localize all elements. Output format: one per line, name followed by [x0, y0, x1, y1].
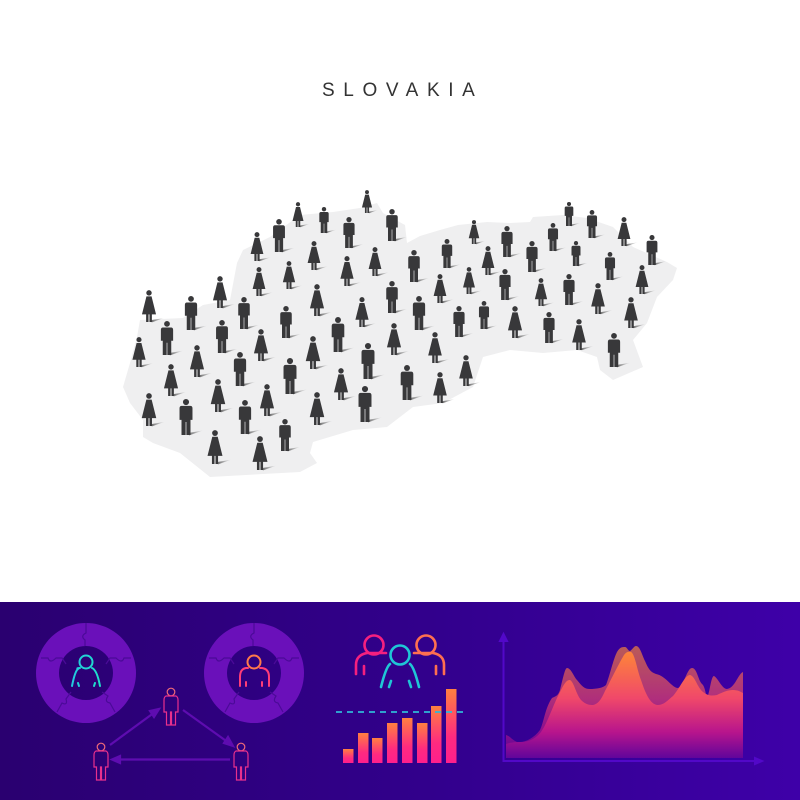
map: Slovakia silhouette	[123, 203, 677, 477]
title: SLOVAKIA	[322, 80, 483, 101]
icon: top person outline	[164, 688, 178, 725]
people figures on the map	[132, 190, 666, 470]
arrow: top person to right person	[183, 710, 233, 746]
diagram: three people linked by arrows	[94, 688, 248, 780]
donut: right puzzle ring with orange person	[204, 623, 304, 723]
icon: left person pink	[356, 636, 386, 674]
bar chart	[343, 689, 456, 763]
panel: bottom infographic band	[0, 602, 800, 800]
dashed threshold line	[336, 711, 464, 713]
icon: right person orange	[414, 636, 444, 674]
icon: left person outline	[94, 743, 108, 780]
arrow: left person to top person	[110, 709, 159, 745]
arrow: right person to left person	[112, 756, 230, 763]
area chart: front layer	[506, 652, 743, 758]
icon: teal person	[72, 656, 100, 686]
icon: centre person teal	[381, 646, 419, 687]
icon: right person outline	[234, 743, 248, 780]
icon: group of three people	[356, 636, 444, 687]
icon: orange person	[240, 656, 269, 686]
area chart: back layer	[506, 646, 743, 758]
area chart axes	[500, 634, 762, 764]
donut: left puzzle ring with teal person	[36, 623, 136, 723]
